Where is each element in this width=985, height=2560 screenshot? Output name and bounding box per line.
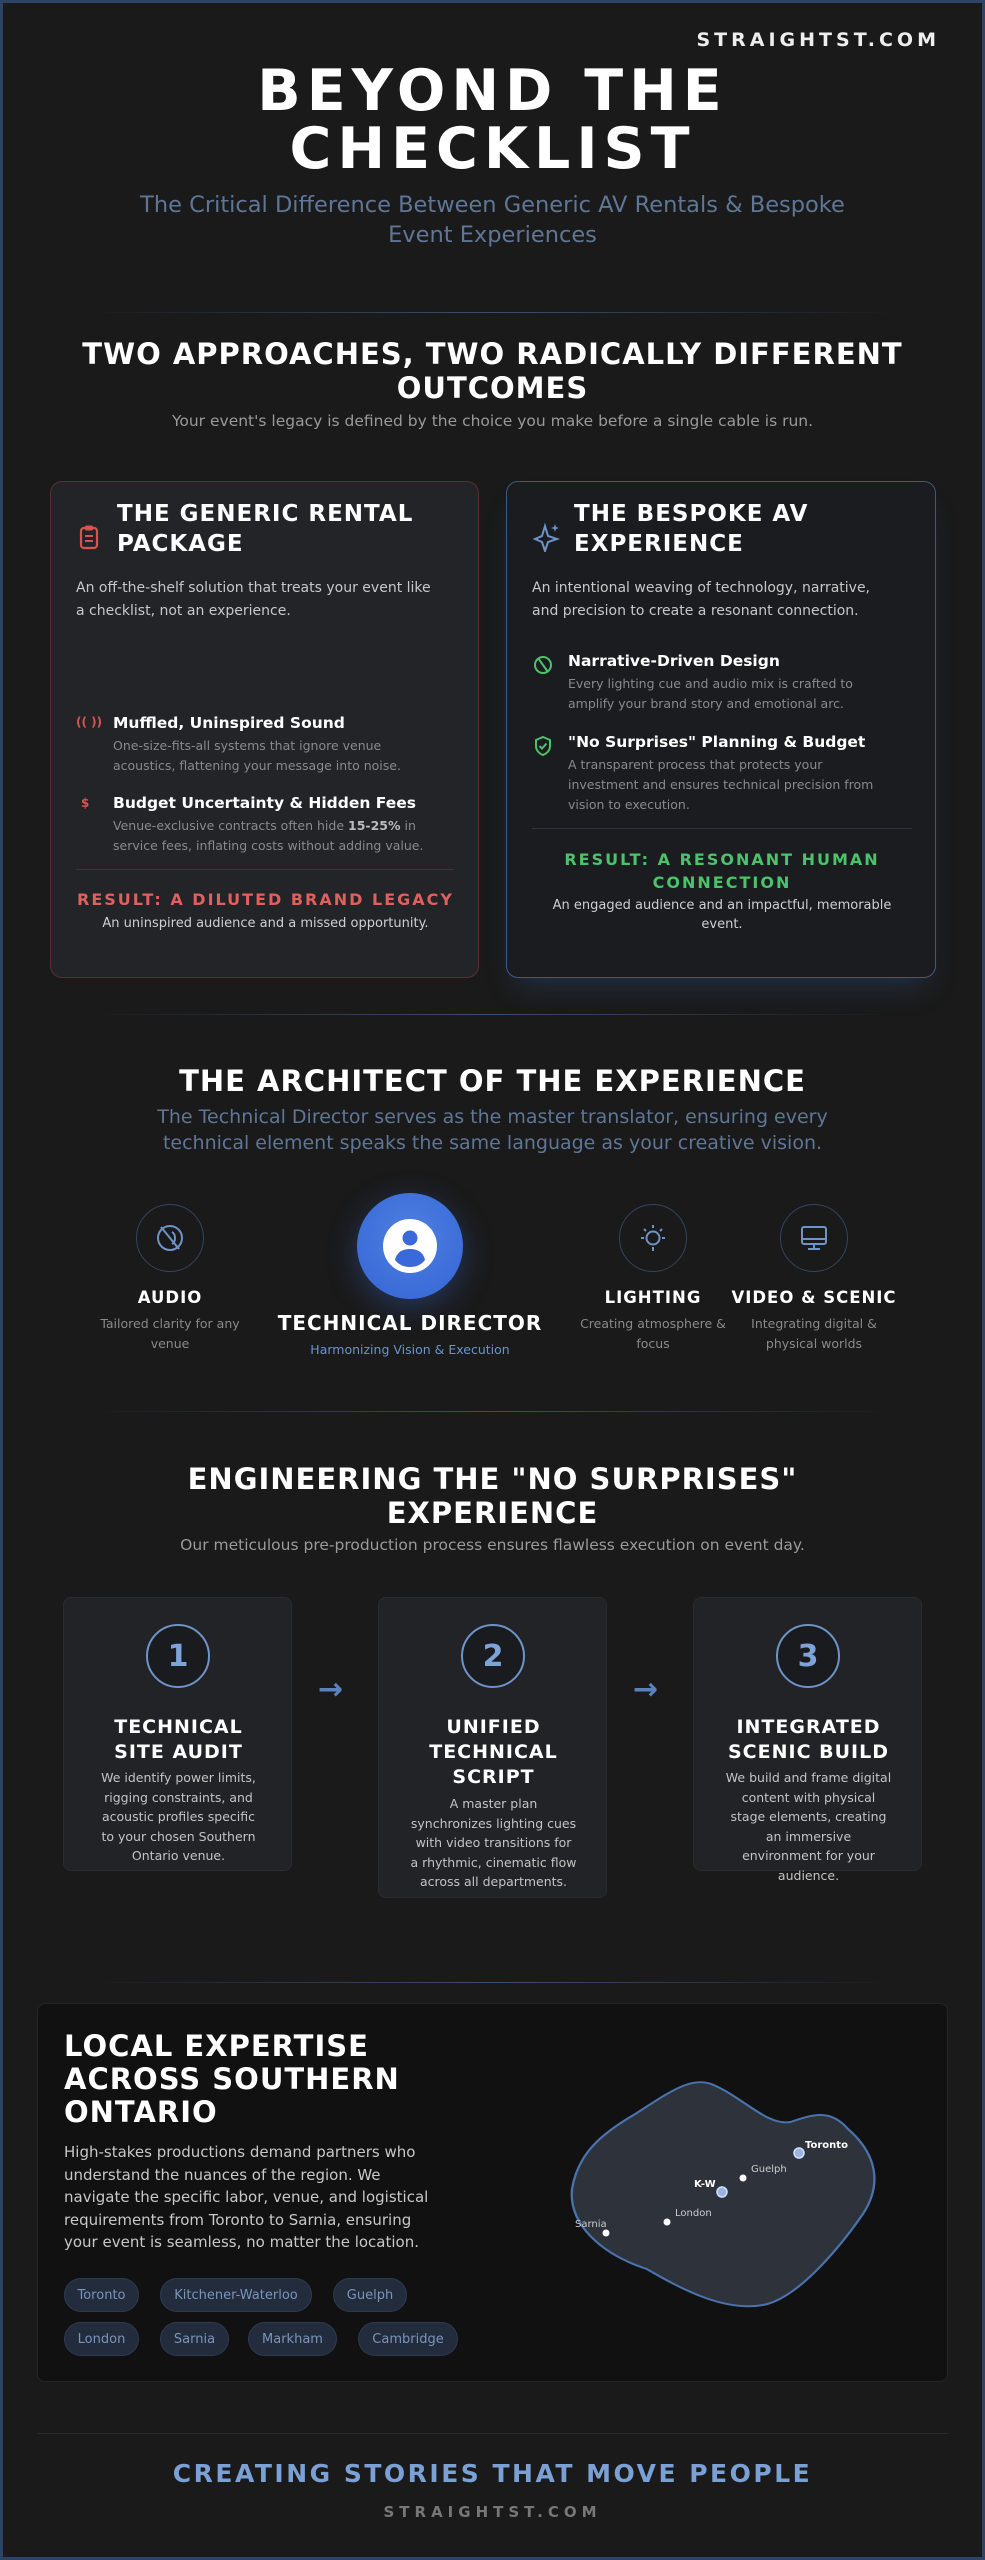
step 2: with video transitions for <box>416 1835 571 1850</box>
panel: generic rental: An uninspired audience and a missed opportunity. <box>102 916 429 931</box>
local heading: ACROSS SOUTHERN <box>64 2062 400 2096</box>
node: audio: venue <box>151 1336 189 1351</box>
node: lighting <box>580 1204 726 1351</box>
arrow 1: → <box>318 1672 343 1707</box>
result: resonant: RESULT: A RESONANT HUMAN <box>564 850 880 869</box>
city chips: Kitchener-Waterloo <box>174 2288 298 2302</box>
result: resonant: CONNECTION <box>653 873 791 892</box>
step 2: across all departments. <box>420 1874 567 1889</box>
city chips: Cambridge <box>372 2332 444 2346</box>
step 3: content with physical <box>742 1790 875 1804</box>
card description: and precision to create a resonant connection. <box>532 603 859 619</box>
card description: An off-the-shelf solution that treats your event like <box>76 580 431 596</box>
heading: engineering: EXPERIENCE <box>387 1496 598 1530</box>
local paragraph: requirements from Toronto to Sarnia, ensuring <box>64 2210 411 2228</box>
card title <box>574 501 808 557</box>
step 3: environment for your <box>742 1848 875 1863</box>
arrow 2: → <box>633 1672 658 1707</box>
result: diluted: RESULT: A DILUTED BRAND LEGACY <box>77 890 454 909</box>
step 3: 3 <box>798 1638 818 1674</box>
step 1: acoustic profiles specific <box>102 1809 255 1824</box>
icon: clipboard <box>80 526 98 550</box>
feature: sound: Muffled, Uninspired Sound <box>113 714 345 732</box>
feature: budget: service fees, inflating costs without adding value. <box>113 838 423 853</box>
local heading: LOCAL EXPERTISE <box>64 2029 369 2063</box>
local heading: ONTARIO <box>64 2095 218 2129</box>
feature: narrative: amplify your brand story and emotional arc. <box>568 696 844 711</box>
panel: generic rental <box>50 481 479 978</box>
footer tagline: CREATING STORIES THAT MOVE PEOPLE <box>173 2459 812 2488</box>
node: audio <box>100 1204 240 1351</box>
heading: engineering: ENGINEERING THE "NO SURPRISES" <box>188 1462 797 1496</box>
title: BEYOND THE <box>257 58 728 124</box>
feature: no surprises: investment and ensures technical precision from <box>568 777 873 792</box>
step 1: Ontario venue. <box>132 1848 225 1863</box>
feature: narrative: Every lighting cue and audio mix is crafted to <box>568 676 853 691</box>
step 3: SCENIC BUILD <box>728 1741 889 1763</box>
feature: sound: One-size-fits-all systems that ignore venue <box>113 738 381 753</box>
city chips: Toronto <box>78 2288 126 2302</box>
feature: no surprises: vision to execution. <box>568 797 690 812</box>
node: technical director <box>278 1187 542 1357</box>
step 3: We build and frame digital <box>726 1770 891 1785</box>
map: K-W <box>694 2179 716 2190</box>
node: technical director: Harmonizing Vision & Execution <box>310 1342 510 1357</box>
card description <box>532 580 870 619</box>
footer brand: STRAIGHTST.COM <box>383 2503 602 2521</box>
panel: bespoke <box>506 481 936 978</box>
heading: engineering <box>188 1462 797 1530</box>
card title: PACKAGE <box>117 531 244 557</box>
local heading <box>64 2029 400 2129</box>
node: lighting: focus <box>636 1336 670 1351</box>
map: London <box>675 2208 712 2219</box>
step 1: to your chosen Southern <box>101 1828 256 1844</box>
node: video: physical worlds <box>766 1336 862 1351</box>
feature: budget <box>81 794 423 853</box>
node: lighting: Creating atmosphere & <box>580 1316 726 1331</box>
step 3: INTEGRATED <box>736 1716 881 1738</box>
step 1: rigging constraints, and <box>104 1790 253 1804</box>
city chips: Markham <box>262 2332 323 2346</box>
card title: THE GENERIC RENTAL <box>117 501 413 527</box>
map <box>570 2081 876 2308</box>
feature: sound: acoustics, flattening your message into noise. <box>113 758 401 773</box>
node: technical director: TECHNICAL DIRECTOR <box>278 1311 542 1335</box>
feature: budget: Venue-exclusive contracts often hide 15-25% in <box>113 818 416 833</box>
step 1: We identify power limits, <box>101 1770 256 1785</box>
subtitle: Event Experiences <box>388 222 597 248</box>
step 2: synchronizes lighting cues <box>411 1816 576 1830</box>
card title: THE BESPOKE AV <box>574 501 808 527</box>
city chips: Sarnia <box>174 2332 215 2346</box>
feature: narrative <box>534 652 853 711</box>
feature: sound: (( )) <box>76 715 102 729</box>
title <box>257 58 728 182</box>
subtitle: The Critical Difference Between Generic AV Rentals & Bespoke <box>140 192 845 218</box>
feature: budget: Budget Uncertainty & Hidden Fees <box>113 794 416 812</box>
subtitle <box>140 192 845 248</box>
node: video: VIDEO & SCENIC <box>731 1288 897 1307</box>
card title <box>117 501 413 557</box>
map: Toronto <box>805 2140 848 2151</box>
card description: a checklist, not an experience. <box>76 603 291 619</box>
local paragraph: your event is seamless, no matter the location. <box>64 2233 419 2251</box>
step 2: a rhythmic, cinematic flow <box>411 1854 576 1870</box>
step 2 <box>378 1597 607 1898</box>
icon: sparkle <box>533 522 560 552</box>
card title: EXPERIENCE <box>574 531 744 557</box>
step 3: an immersive <box>766 1828 851 1844</box>
architect subtitle: technical element speaks the same language as your creative vision. <box>163 1132 822 1154</box>
step 2: SCRIPT <box>452 1766 535 1788</box>
heading: two approaches: TWO APPROACHES, TWO RADICALLY DIFFERENT OUTCOMES <box>82 337 903 405</box>
city chips: Guelph <box>347 2288 393 2302</box>
node: audio: Tailored clarity for any <box>100 1316 240 1331</box>
local paragraph <box>64 2143 428 2251</box>
heading: architect: THE ARCHITECT OF THE EXPERIENCE <box>179 1064 806 1098</box>
feature: sound <box>76 714 401 773</box>
node: video <box>731 1204 897 1351</box>
node: video: Integrating digital & <box>751 1316 877 1331</box>
step 2: UNIFIED <box>446 1716 541 1738</box>
step 1: TECHNICAL <box>114 1716 243 1738</box>
feature: narrative: Narrative-Driven Design <box>568 652 780 670</box>
feature: budget: $ <box>81 796 89 810</box>
feature: no surprises <box>535 733 873 812</box>
title: CHECKLIST <box>290 116 695 182</box>
city chips <box>64 2278 458 2356</box>
panel: local expertise <box>37 2003 948 2382</box>
step 1: SITE AUDIT <box>114 1741 243 1763</box>
local paragraph: High-stakes productions demand partners who <box>64 2143 415 2161</box>
step 1: 1 <box>168 1638 188 1674</box>
result: resonant <box>564 850 880 892</box>
card description <box>76 580 431 619</box>
engineering subtitle: Our meticulous pre-production process ensures flawless execution on event day. <box>180 1536 805 1554</box>
panel: bespoke: event. <box>701 917 743 932</box>
step 3: stage elements, creating <box>730 1809 886 1824</box>
architect subtitle <box>157 1106 828 1154</box>
map: Guelph <box>751 2164 787 2175</box>
panel: bespoke: An engaged audience and an impactful, memorable <box>553 898 891 913</box>
node: audio: AUDIO <box>138 1288 202 1307</box>
node: lighting: LIGHTING <box>605 1288 701 1307</box>
local paragraph: understand the nuances of the region. We <box>64 2166 381 2184</box>
city chips: London <box>78 2332 125 2346</box>
local paragraph: navigate the specific labor, venue, and logistical <box>64 2188 428 2206</box>
step 2: TECHNICAL <box>429 1741 558 1763</box>
feature: no surprises: A transparent process that protects your <box>568 757 822 772</box>
text: audience. <box>778 1868 839 1882</box>
brand tag: STRAIGHTST.COM <box>696 29 940 51</box>
map: Sarnia <box>575 2219 607 2230</box>
card description: An intentional weaving of technology, narrative, <box>532 580 870 596</box>
step 2: A master plan <box>450 1796 537 1811</box>
feature: no surprises: "No Surprises" Planning & Budget <box>568 733 865 751</box>
step 3 <box>693 1597 922 1871</box>
architect subtitle: The Technical Director serves as the master translator, ensuring every <box>157 1106 828 1128</box>
step 2: 2 <box>483 1638 503 1674</box>
intro text: Your event's legacy is defined by the choice you make before a single cable is run. <box>172 412 813 430</box>
step 1 <box>63 1597 292 1871</box>
